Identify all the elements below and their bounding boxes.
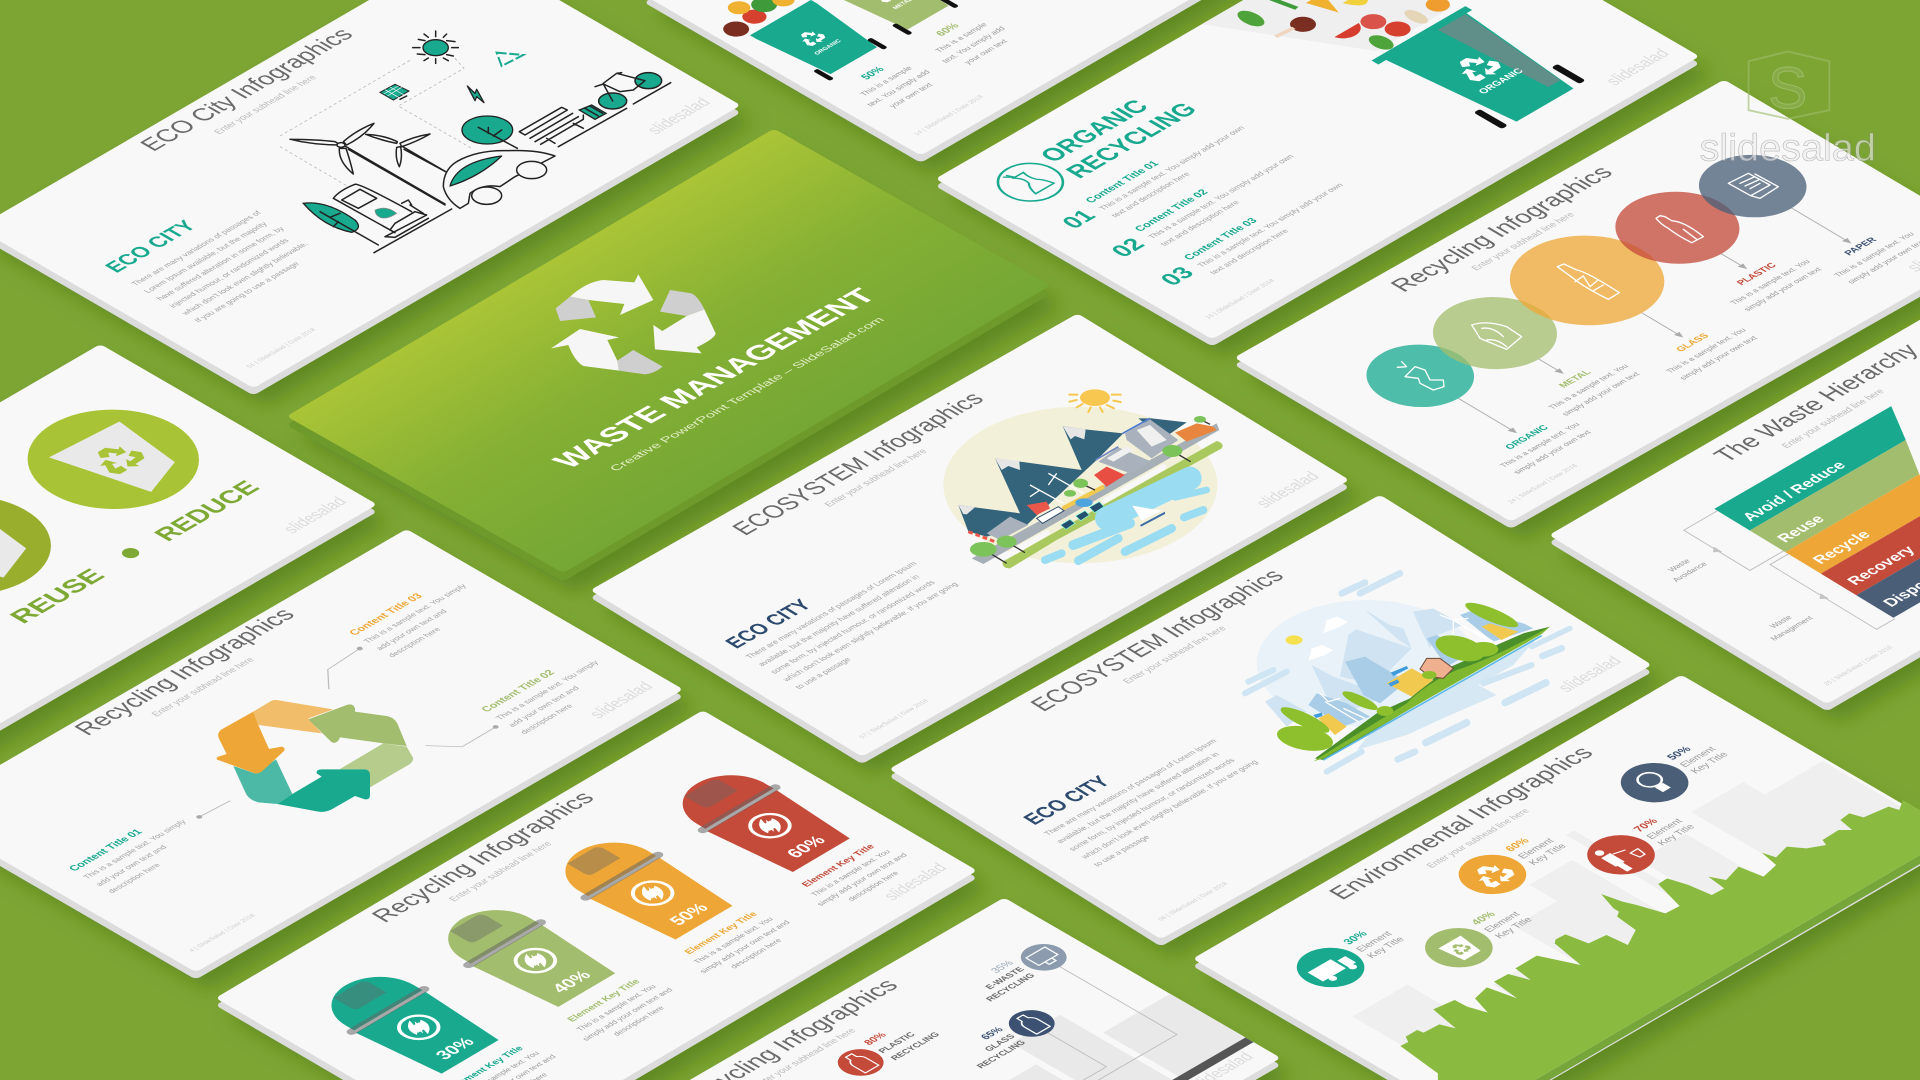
- icon: trash can: [579, 105, 606, 119]
- houses: [1313, 623, 1518, 735]
- bracket: waste avoidance: Waste: [1666, 557, 1693, 573]
- icon: glass bottle: [999, 1005, 1064, 1042]
- buildings: [968, 418, 1217, 542]
- icon: plastic bottle: [828, 1044, 893, 1080]
- callout: content title 01: Content Title 01: [66, 827, 145, 873]
- slide: recycling circles: [1234, 80, 1920, 539]
- text block: available, but the majority have suffered alteration in: [1054, 751, 1221, 845]
- bracket: waste management: Management: [1768, 614, 1816, 642]
- label: glass recycling: 65%: [979, 1026, 1006, 1042]
- label: 30%: Element: [1354, 930, 1395, 954]
- slide: title cover: [287, 129, 1063, 593]
- subheading: Enter your subhead line here: [447, 840, 555, 903]
- label: 50%: Element: [1678, 745, 1719, 769]
- callout: content title 01: description here: [106, 862, 163, 895]
- icon: solar panel: [380, 84, 409, 100]
- callout: content title 03: Content Title 03: [347, 592, 425, 637]
- brand watermark: slidesalad logo: [1700, 51, 1876, 169]
- icon: bin 40%: [1411, 920, 1507, 976]
- list: content items: This is a sample text. You simply add your own: [1097, 125, 1247, 212]
- footer: 51 | SlideSalad | Date 2018: [245, 327, 318, 369]
- skyline: [1265, 608, 1463, 727]
- label: glass recycling: [952, 1026, 1028, 1070]
- list: content items: Content Title 01: [1083, 159, 1162, 205]
- icon: lightning: [467, 86, 484, 103]
- footer: 4 | SlideSalad | Date 2018: [188, 913, 258, 953]
- chart: hierarchy funnel: Avoid / Reduce: [1739, 459, 1850, 524]
- cover subtitle: Creative PowerPoint Template – SlideSalad.com: [608, 316, 888, 473]
- labels: PAPER: [1842, 236, 1880, 257]
- labels: ORGANIC: [1503, 424, 1552, 451]
- brand watermark: slidesalad logo: S: [1768, 56, 1807, 121]
- label: 40%: Element: [1482, 910, 1523, 934]
- icon: recycle 60%: [1445, 847, 1540, 902]
- label: 60%: 60%: [933, 21, 963, 38]
- list: content items: Content Title 02: [1132, 188, 1211, 233]
- label: 70%: Key Title: [1655, 823, 1698, 847]
- label: 70%: Element: [1645, 817, 1686, 841]
- bin: 50%: This is a sample text. You: [692, 916, 775, 965]
- leader lines: [130, 646, 500, 860]
- sailboat: [1132, 506, 1165, 527]
- heading: organic recycling: ORGANIC: [1034, 96, 1155, 166]
- watermark: slidesalad: [585, 679, 657, 721]
- bin: 40%: Element Key Title: [565, 978, 643, 1024]
- text block: eco city description: There are many variations of passages of: [129, 209, 264, 287]
- footer: 14 | SlideSalad | Date 2018: [913, 94, 986, 137]
- subheading: Enter your subhead line here: [1121, 624, 1229, 686]
- label: 30%: [1341, 921, 1408, 960]
- chart: hierarchy funnel: Reuse: [1774, 513, 1829, 545]
- bin: 40%: simply add your own text and: [580, 987, 675, 1042]
- bracket: waste management: Waste: [1768, 614, 1795, 630]
- heading: ECOSYSTEM Infographics: [1025, 566, 1290, 715]
- icons in circles: [1397, 173, 1778, 390]
- label: 40%: Key Title: [1493, 916, 1536, 940]
- watermark: slidesalad: [1553, 653, 1626, 695]
- text block: some form, by injected humour, or randomized words: [1067, 757, 1237, 852]
- text block: available, but the majority have suffered alteration in: [756, 573, 922, 668]
- labels: PLASTIC: [1735, 261, 1780, 287]
- arrows to labels: [1455, 207, 1854, 435]
- slide: recycling rates: [517, 898, 1293, 1080]
- icon: sun: [1069, 389, 1121, 412]
- metal bin: [826, 0, 960, 37]
- label: 30%: 30%: [1341, 929, 1371, 947]
- watermark: slidesalad: [879, 860, 951, 903]
- chart: three arrow recycling loop: [217, 700, 413, 812]
- label: glass recycling: RECYCLING: [974, 1039, 1028, 1070]
- label: 50%: [1665, 737, 1731, 775]
- callout: content title 02: Content Title 02: [479, 668, 558, 714]
- road: [972, 423, 1219, 564]
- icon: person littering 70%: [1573, 827, 1669, 883]
- icon: sun: [413, 31, 458, 63]
- bin: 50%: simply add your own text and: [697, 919, 792, 975]
- label: 60%: Element: [1516, 837, 1557, 861]
- watermark: slidesalad: [278, 494, 351, 536]
- list: content items: text and description here: [1208, 227, 1291, 276]
- label: reuse: REUSE: [4, 565, 111, 627]
- watermark: slidesalad: [1601, 46, 1673, 88]
- label: 50%: text. You simply add: [865, 69, 932, 108]
- dark road band: [971, 1037, 1253, 1080]
- labels: simply add your own text: [1742, 266, 1824, 313]
- label: 60%: [1503, 828, 1570, 867]
- chart: hierarchy funnel: Recycle: [1809, 528, 1875, 567]
- dot separator: [118, 546, 143, 560]
- trees: [1275, 598, 1520, 755]
- heading: eco city: ECO CITY: [1019, 773, 1115, 828]
- turbines: [1320, 615, 1493, 722]
- bin: 60%: [654, 758, 920, 914]
- callout: content title 03: This is a sample text. You simply: [362, 583, 468, 645]
- slide: reduce reuse: [0, 344, 389, 804]
- label: glass recycling: GLASS: [982, 1032, 1017, 1053]
- water strip: [1357, 637, 1538, 750]
- footer: 57 | SlideSalad | Date 2018: [858, 698, 931, 740]
- icon: e-waste monitor: [1011, 938, 1076, 976]
- bin: 60%: description here: [846, 870, 901, 902]
- green edge of slide: [1535, 855, 1920, 1080]
- icon: bulb 50%: [1607, 755, 1702, 810]
- food items: [1233, 0, 1461, 78]
- bin: 40%: 40%: [548, 967, 595, 996]
- clouds: [1308, 617, 1348, 661]
- bin: 40%: This is a sample text. You: [574, 983, 658, 1032]
- label: e-waste recycling: [962, 959, 1037, 1003]
- callout: content title 03: description here: [386, 626, 443, 659]
- island: [1315, 627, 1550, 760]
- heading: Recycling Infographics: [1385, 163, 1619, 296]
- sky bars: [1245, 573, 1400, 693]
- bin: 50%: description here: [728, 937, 784, 970]
- callout: content title 01: [66, 810, 213, 895]
- circle icon: reuse: [0, 475, 86, 616]
- text block: eco city description: If you are going to use a passage: [192, 260, 302, 324]
- heading: ECO City Infographics: ECO City Infographics: [135, 25, 360, 155]
- label: 70%: [1631, 809, 1698, 847]
- organic bin: [750, 0, 890, 81]
- slide: environmental infographics: [1193, 675, 1920, 1080]
- watermark: slidesalad: [642, 95, 715, 137]
- icon: wind turbine 2: [366, 134, 446, 172]
- label: e-waste recycling: E-WASTE: [983, 965, 1026, 991]
- text block: which don't look even slightly believable. If you are going: [1078, 759, 1260, 861]
- bin: 60%: 60%: [782, 833, 830, 861]
- slide: recycling bins top: [644, 0, 1420, 173]
- slide: recycling bins percentages: [216, 710, 989, 1080]
- icon: recycle logo: [551, 274, 716, 374]
- funnel background: [1202, 0, 1521, 88]
- footer: 15 | SlideSalad | Date 2018: [1204, 278, 1277, 320]
- list: content items: Content Title 03: [1181, 216, 1260, 262]
- bin: 60%: This is a sample text. You: [809, 848, 893, 898]
- subheading: Enter your subhead line here: [822, 447, 930, 509]
- label: e-waste recycling: 35%: [989, 959, 1016, 975]
- callout: content title 01: This is a sample text. You simply: [81, 818, 188, 880]
- labels: This is a sample text. You: [1546, 363, 1630, 411]
- bin: 40%: [420, 893, 686, 1049]
- cover title: WASTE MANAGEMENT: [545, 284, 883, 472]
- labels: GLASS: [1674, 332, 1712, 354]
- callout: content title 02: This is a sample text. You simply: [494, 659, 601, 721]
- text block: eco city description: which don't look even slightly believable.: [179, 241, 310, 317]
- grey background buildings: [1303, 723, 1912, 1078]
- callout: content title 03: add your own text and: [374, 608, 449, 652]
- label: 50%: 50%: [1665, 745, 1694, 762]
- text block: to use a passage: [1092, 833, 1152, 868]
- sun: [1286, 635, 1302, 645]
- subheading: Enter your subhead line here: [150, 656, 257, 718]
- footer: 25 | SlideSalad | Date 2018: [1822, 644, 1895, 687]
- icon: apple core circle: [985, 156, 1076, 209]
- watermark: slidesalad: [1251, 469, 1323, 510]
- label: 60%: Key Title: [1527, 842, 1570, 867]
- chart: hierarchy funnel: [1714, 406, 1920, 618]
- bin: 60%: Element Key Title: [800, 843, 877, 889]
- leader lines: [909, 967, 1177, 1080]
- heading: Recycling Infographics: [69, 605, 301, 739]
- icon: round tree: [462, 116, 517, 148]
- label: 60%: [913, 10, 1019, 71]
- circle icon: reduce: [0, 389, 234, 530]
- footer: 24 | SlideSalad | Date 2018: [1507, 463, 1580, 505]
- label: reduce: REDUCE: [149, 477, 266, 545]
- label: 50%: Key Title: [1689, 751, 1731, 775]
- green city skyline: [1400, 800, 1920, 1080]
- bin: 50%: [537, 825, 803, 981]
- bracket: waste avoidance: [1636, 511, 1783, 598]
- labels: [1456, 206, 1920, 476]
- bin: 50%: Element Key Title: [682, 910, 760, 956]
- organic bin large: ORGANIC: [1477, 67, 1526, 96]
- slide: recycling arrows: [0, 529, 696, 989]
- heading: Recycling Infographics: [366, 788, 601, 926]
- slide: organic recycling: [936, 0, 1712, 356]
- slide: ecosystem mountains: [590, 313, 1362, 774]
- slide: ecosystem city: [889, 495, 1664, 956]
- icon: truck 30%: [1283, 940, 1378, 995]
- icon: wind turbine 1: [290, 123, 445, 205]
- text block: to use a passage: [793, 656, 853, 690]
- text block: eco city description: [128, 209, 327, 324]
- list: content items: 01: [1056, 206, 1101, 232]
- icon: recycle triangle: [497, 53, 523, 66]
- label: 50%: your own text: [887, 81, 935, 109]
- icon: bicycle: [595, 73, 662, 109]
- illustration: green city island: [1245, 573, 1570, 772]
- subheading: Enter your subhead line here: [212, 74, 320, 136]
- slide: waste hierarchy: [1549, 252, 1920, 721]
- labels: simply add your own text: [1511, 429, 1594, 476]
- text block: There are many variations of passages of Lorem Ipsum: [744, 560, 919, 660]
- icon: bench: [519, 107, 583, 144]
- organic bin large: [1372, 6, 1591, 133]
- icon: teal tree: [303, 203, 378, 245]
- list: content items: 02: [1105, 234, 1150, 261]
- label: plastic recycling: PLASTIC: [876, 1030, 918, 1054]
- footer: 58 | SlideSalad | Date 2018: [1157, 881, 1230, 922]
- heading: organic recycling: RECYCLING: [1060, 99, 1203, 182]
- illustration: eco city line art: [280, 31, 671, 253]
- label: 60%: This is a sample: [933, 21, 989, 54]
- text block: some form, by injected humour, or randomized words: [768, 579, 937, 675]
- list: content items: 03: [1154, 263, 1199, 289]
- labels: simply add your own text: [1677, 334, 1760, 381]
- organic bin: ORGANIC: [814, 39, 844, 56]
- illustration: mountain town: [943, 389, 1223, 568]
- callout: content title 02: description here: [518, 702, 575, 735]
- ground strip: [1003, 441, 1223, 568]
- chart: hierarchy funnel: Recovery: [1844, 544, 1919, 588]
- subheading: Enter your subhead line here: [1469, 211, 1577, 272]
- heading: Environmental Infographics: [1324, 743, 1600, 904]
- label: 40%: [1469, 902, 1536, 940]
- brand watermark: slidesalad logo: slidesalad: [1700, 127, 1876, 169]
- callout: content title 01: add your own text and: [94, 844, 169, 887]
- bin: 60%: simply add your own text and: [815, 852, 909, 907]
- list: content items: This is a sample text. You simply add your own: [1195, 182, 1345, 269]
- trees: [970, 416, 1210, 563]
- labels: This is a sample text. You: [1728, 258, 1812, 306]
- bin: 40%: description here: [611, 1005, 666, 1037]
- heading: ECOSYSTEM Infographics: [727, 389, 990, 539]
- label: 40%: 40%: [1469, 910, 1499, 927]
- list: content items: text and description here: [1109, 170, 1193, 219]
- callout: content title 02: add your own text and: [506, 685, 581, 728]
- labels: METAL: [1557, 368, 1594, 390]
- icon: electric car: [443, 150, 555, 208]
- callout: content title 02: [479, 651, 625, 735]
- list: content items: This is a sample text. You simply add your own: [1146, 153, 1296, 240]
- list: content items: [1052, 117, 1358, 294]
- label: e-waste recycling: RECYCLING: [984, 972, 1037, 1003]
- bracket: waste management: [1708, 554, 1895, 665]
- slide: eco city line art: [0, 0, 753, 405]
- label: 50%: [838, 53, 944, 115]
- bin: 30%: [303, 959, 569, 1080]
- mountains: [958, 418, 1187, 537]
- food pile: [694, 0, 802, 40]
- text block: [743, 558, 972, 691]
- label: plastic recycling: [862, 1015, 942, 1062]
- heading: eco city: ECO CITY: [721, 596, 817, 652]
- label: 60%: your own text: [962, 38, 1010, 66]
- callout: content title 03: [347, 574, 493, 659]
- subheading: Enter your subhead line here: [1780, 387, 1887, 450]
- label: 70%: 70%: [1631, 817, 1661, 834]
- bin: 50%: 50%: [665, 900, 713, 928]
- list: content items: text and description here: [1159, 199, 1242, 247]
- label: 60%: text. You simply add: [940, 25, 1007, 64]
- label: plastic recycling: RECYCLING: [888, 1031, 942, 1062]
- labels: This is a sample text. You: [1832, 231, 1916, 278]
- text block: There are many variations of passages of Lorem Ipsum: [1042, 737, 1219, 837]
- chain of circles: [1327, 132, 1846, 429]
- grey buildings: [950, 972, 1245, 1080]
- text block: which don't look even slightly believable. If you are going: [780, 581, 960, 683]
- label: plastic recycling: 80%: [862, 1031, 889, 1047]
- text block: eco city description: injected humour, or randomized words: [167, 237, 291, 309]
- text block: eco city description: Lorem Ipsum available, but the majority: [142, 221, 269, 294]
- icon: charging station: [333, 184, 428, 237]
- label: 30%: Key Title: [1365, 935, 1408, 960]
- subheading: Enter your subhead line here: [1424, 807, 1532, 870]
- labels: This is a sample text. You: [1664, 327, 1748, 375]
- label: 60%: 60%: [1503, 836, 1532, 853]
- labels: This is a sample text. You: [1498, 421, 1582, 469]
- label: 50%: This is a sample: [858, 65, 914, 97]
- heading: ECO CITY: ECO CITY: [101, 217, 201, 276]
- water: [1045, 478, 1207, 561]
- text block: [1041, 735, 1272, 868]
- bin: 30%: 30%: [431, 1034, 479, 1062]
- text block: eco city description: have suffered alteration in some form, by: [155, 225, 286, 302]
- label: 50%: 50%: [859, 65, 888, 82]
- labels: simply add your own text: [1560, 370, 1642, 417]
- bracket: waste avoidance: Avoidance: [1670, 560, 1710, 583]
